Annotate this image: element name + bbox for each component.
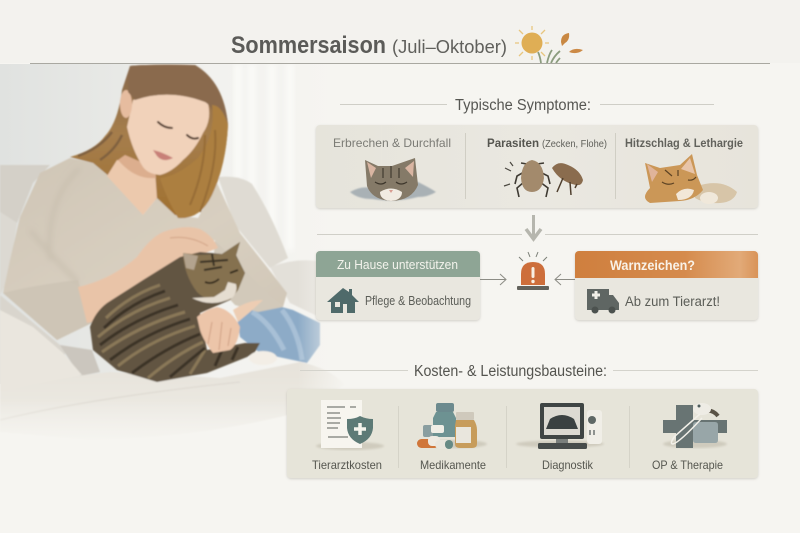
face [127,95,209,175]
photo fade-outs [298,64,348,394]
hair front [128,65,228,135]
symptom: heatstroke and lethargy: Hitzschlag & Lethargie [625,136,743,150]
panel: symptoms [316,125,758,208]
arrow: warning signs to alert [555,274,575,285]
icon: house [327,288,359,313]
photo: woman with tabby cat on sofa [0,64,348,446]
cat paw [249,351,277,365]
icon: ambulance [587,289,619,314]
eyes, nose and mouth [158,122,198,139]
symptom: vomiting and diarrhea [333,136,451,201]
panel: home support [316,251,480,320]
tabby cat [90,242,260,382]
icon: sun with grass and leaves [515,26,583,63]
icon: alarm light [517,252,549,290]
cost: diagnostics [516,403,604,472]
title [231,32,507,59]
sweater [3,158,287,340]
seat cushion [0,362,345,440]
cost: diagnostics: Diagnostik [542,458,594,472]
cost: medication: Medikamente [420,458,486,472]
arrow: symptoms to alert [526,215,541,239]
symptom: vomiting and diarrhea: Erbrechen & Durchfall [333,136,451,150]
pillow [0,310,82,391]
hair back [70,65,228,218]
symptom: heatstroke and lethargy [625,136,743,204]
ear [120,90,132,118]
cat head [183,242,245,301]
jeans [237,303,320,363]
title: Sommersaison [231,32,386,59]
cost: vet fees: Tierarztkosten [312,458,382,472]
title rule [30,63,770,64]
header band [0,0,800,63]
cost: vet fees [312,400,384,472]
cost: medication [417,403,487,472]
cost: surgery and therapy [652,403,727,472]
lower hand and wrist [197,300,263,353]
panel: home support: Pflege & Beobachtung [365,293,471,308]
panel: warning signs: Ab zum Tierarzt! [625,294,720,309]
panel: costs [287,389,758,478]
sofa and cushions [0,165,317,376]
divider rule [317,234,758,236]
heading: typical symptoms: Typische Symptome: [455,97,591,114]
panel: home support: Zu Hause unterstützen [337,257,458,272]
wall and curtain [0,64,340,384]
panel: warning signs [575,251,758,320]
symptom: parasites [487,136,607,197]
panel: warning signs: Warnzeichen? [610,258,695,273]
cost: surgery and therapy: OP & Therapie [652,458,723,472]
heading: cost and service components: Kosten- & Leistungsbausteine: [414,363,607,380]
neck and chest [107,160,157,215]
forearm and hand on cat [78,227,218,323]
title: (Juli–Oktober) [392,36,507,57]
symptom: parasites: Parasiten [487,136,539,150]
arrow: home support to alert [480,274,506,285]
symptom: parasites: (Zecken, Flohe) [542,138,607,150]
